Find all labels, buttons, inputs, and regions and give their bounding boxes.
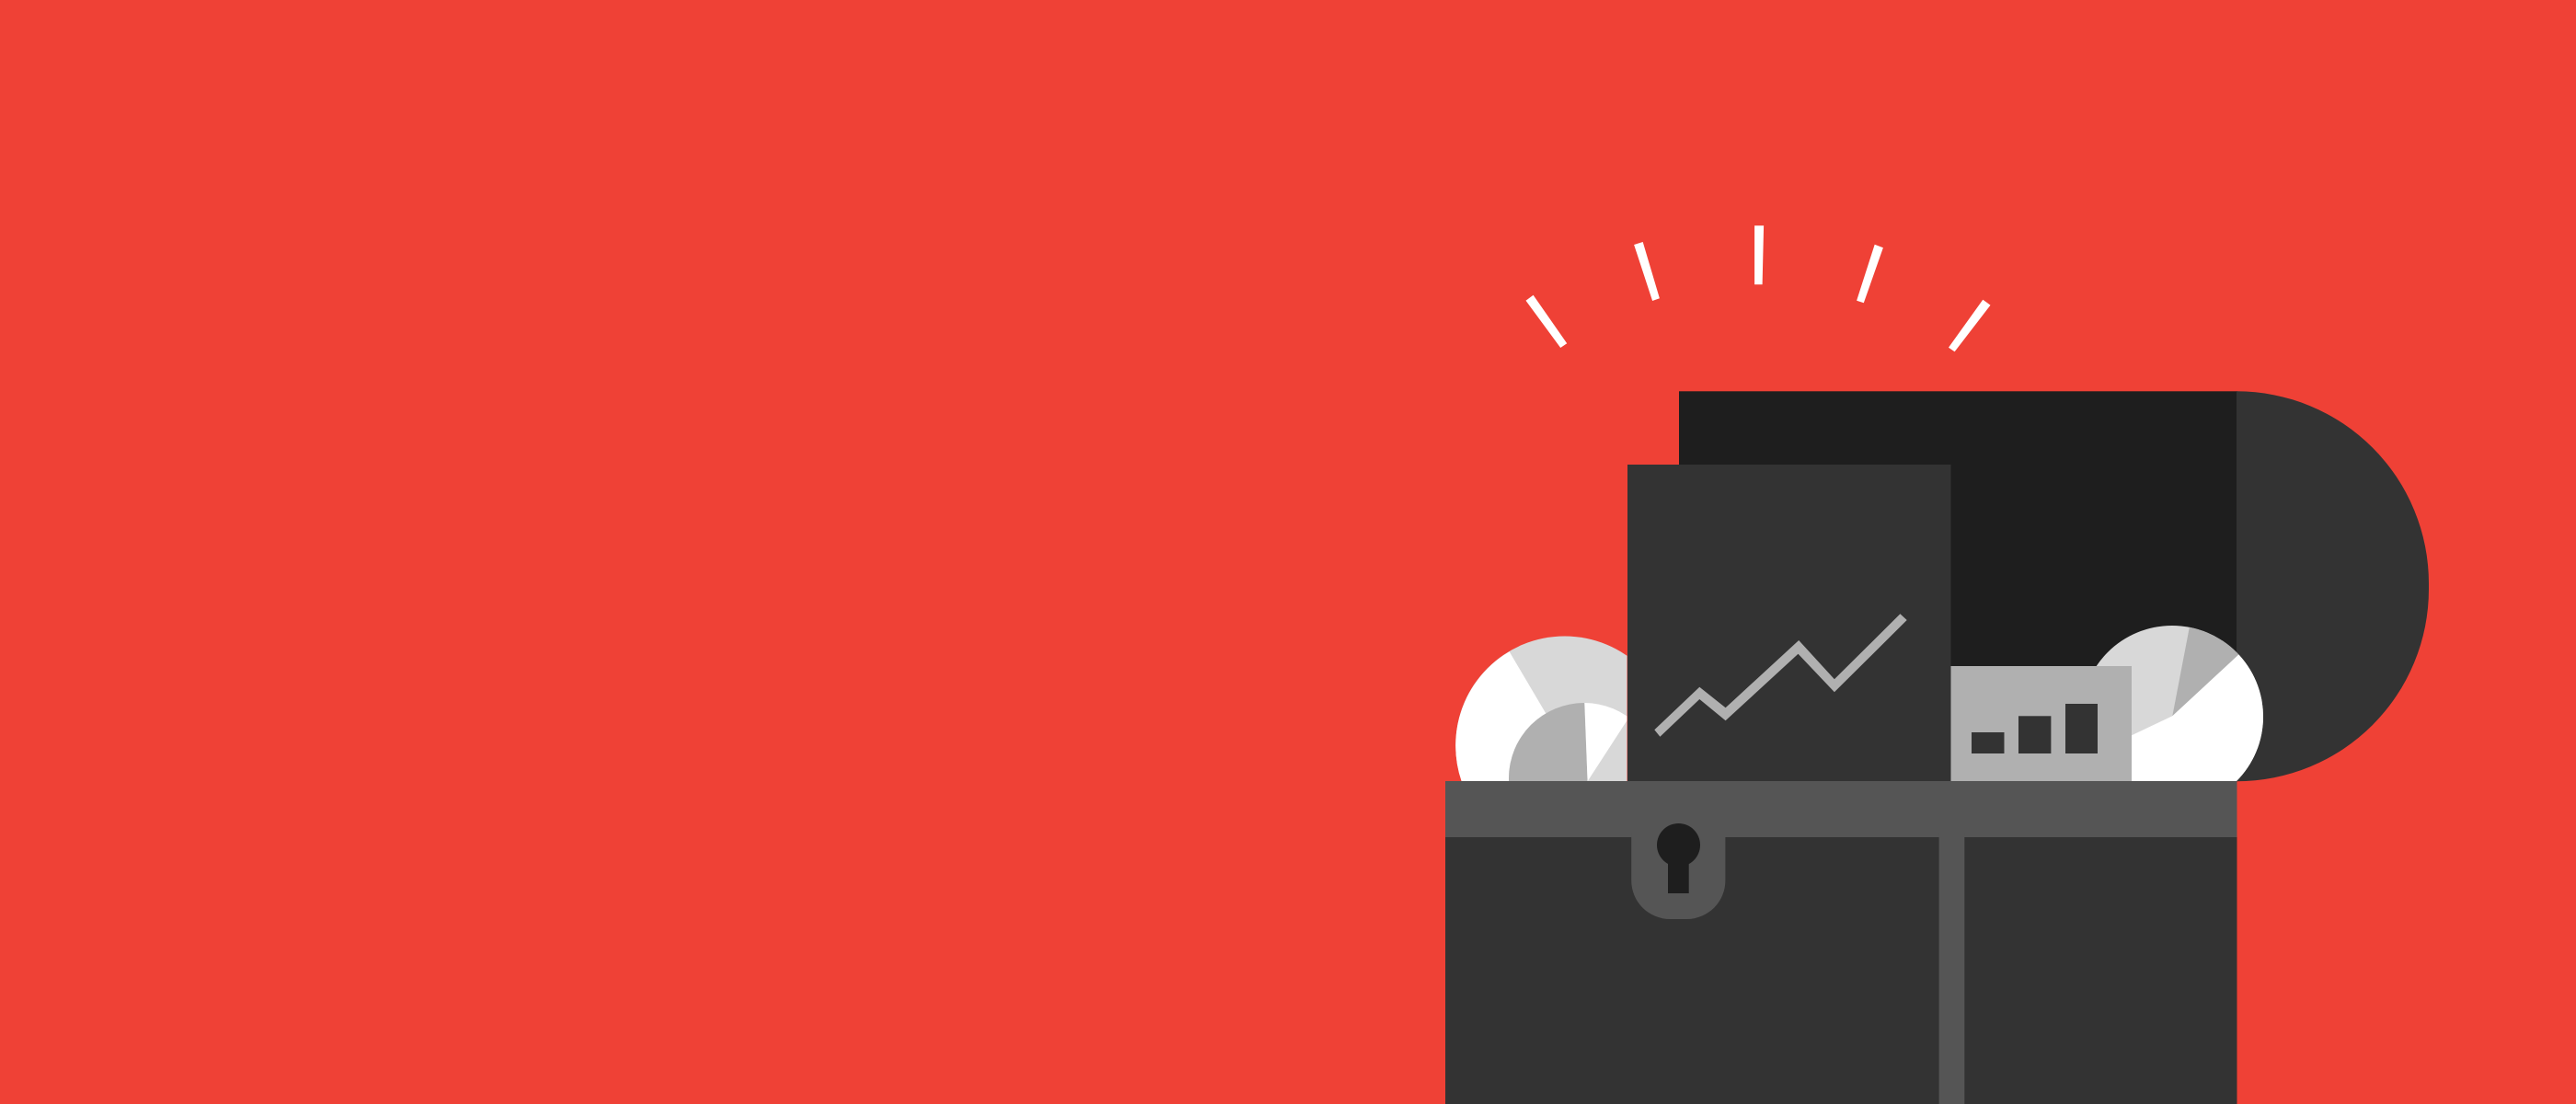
pie chart: left with inner ring [1455,637,1627,781]
burst rays [1525,225,1991,351]
illustration: treasure chest with charts on red background [1445,225,2429,1104]
line chart card [1627,465,1950,781]
chest lid [1679,391,2429,781]
chest strap [1939,833,1964,1104]
bar chart card [1950,666,2132,781]
chest band [1445,781,2237,837]
pie chart: right [2096,626,2263,781]
chest body [1445,837,2237,1104]
lock with keyhole [1631,823,1725,919]
